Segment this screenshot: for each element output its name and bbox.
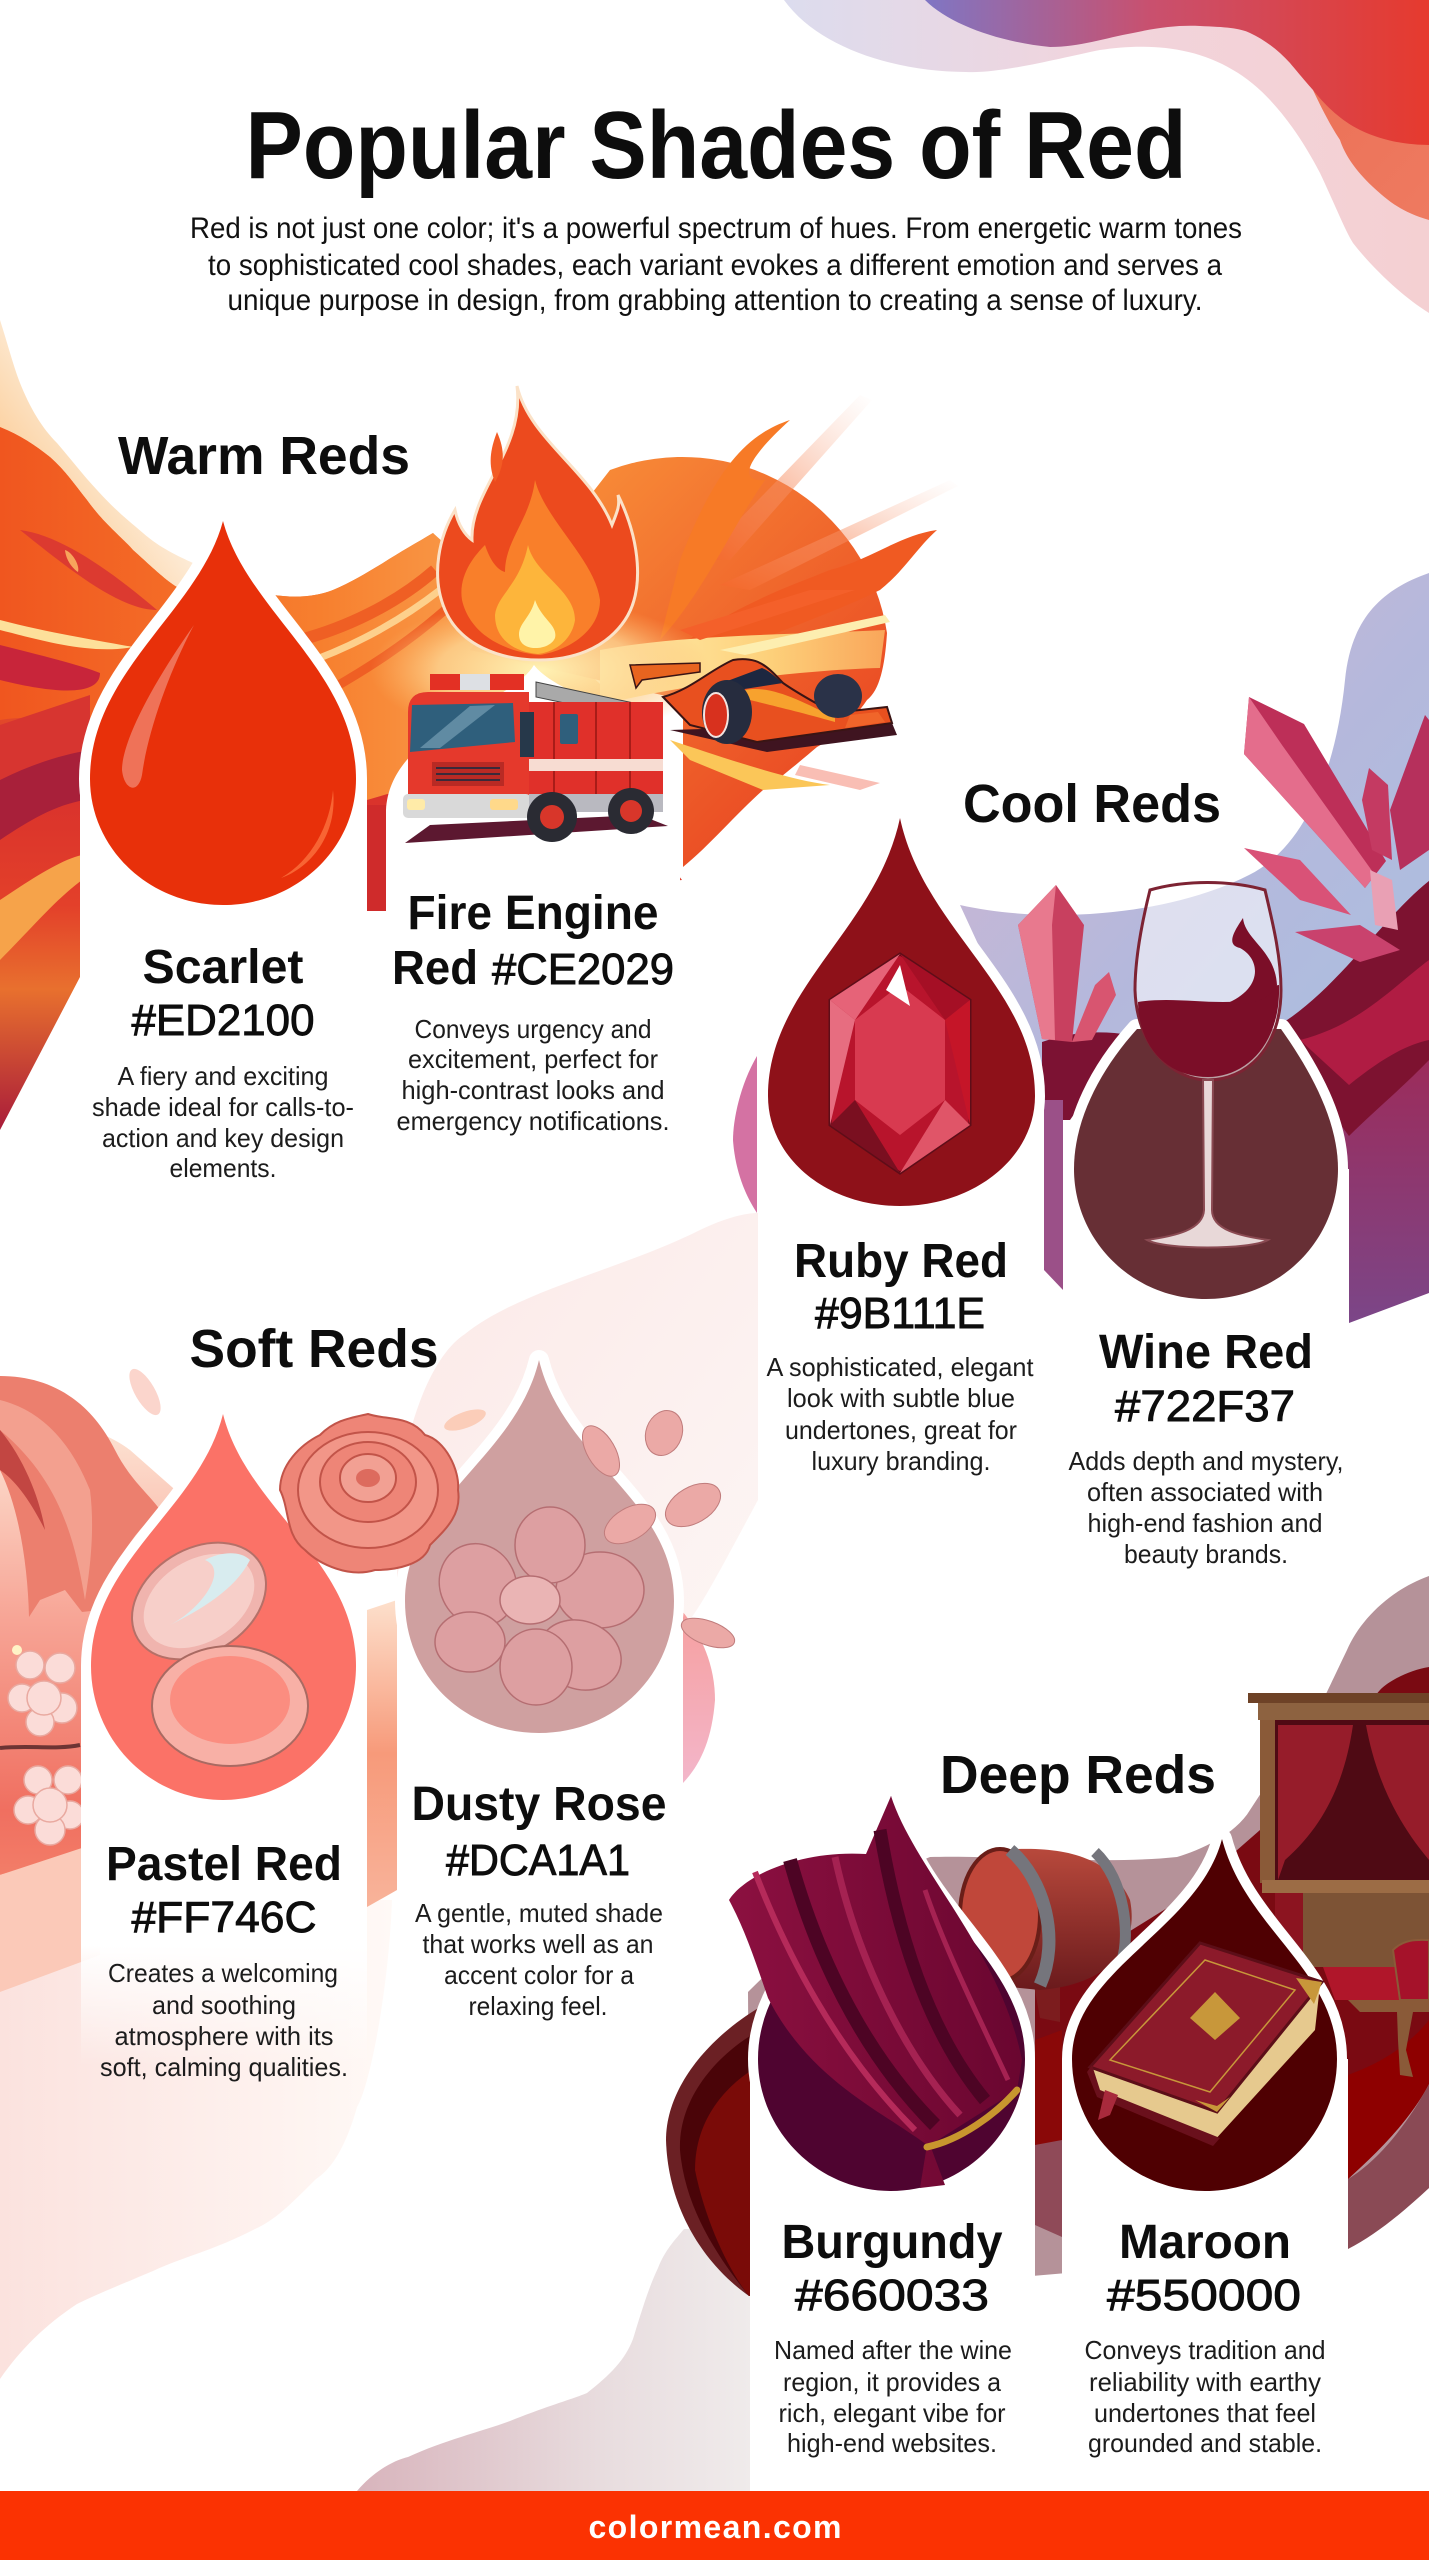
intro paragraph: to sophisticated cool shades, each variant evokes a different emotion and serves a [208, 249, 1222, 282]
wine white backing [1065, 1029, 1349, 1609]
icon: curtain [729, 1796, 1022, 2188]
icon: wine barrel [960, 1849, 1132, 2022]
icon: floating petals [123, 1364, 738, 1654]
maroon drop [1072, 1839, 1337, 2191]
wine drop [1074, 1029, 1338, 1299]
soft background shapes [0, 1425, 715, 1992]
card text: wine red: beauty brands. [1124, 1539, 1288, 1569]
red divider strip [367, 805, 386, 911]
background: top right waves [784, 0, 1429, 313]
icon: flame [438, 386, 638, 660]
orange sun circle [470, 457, 887, 867]
card text: fire engine red: Conveys urgency and [414, 1014, 652, 1044]
maroon white backing [1062, 1839, 1348, 2491]
icon: blush compact [110, 1519, 308, 1766]
scarlet white backing [80, 521, 367, 1219]
card text: scarlet: shade ideal for calls-to- [92, 1092, 354, 1122]
card text: dusty rose: that works well as an [422, 1929, 654, 1959]
card text: fire engine red: high-contrast looks and [402, 1075, 664, 1105]
icon: cherry blossoms [0, 1645, 84, 1845]
card text: pastel red: atmosphere with its [114, 2021, 334, 2051]
card text: dusty rose: A gentle, muted shade [415, 1898, 663, 1928]
card text: burgundy: Burgundy [782, 2216, 1003, 2269]
card text: pastel red: and soothing [152, 1990, 296, 2020]
intro paragraph: Red is not just one color; it's a powerful spectrum of hues. From energetic warm tones [190, 212, 1242, 245]
card text: burgundy: rich, elegant vibe for [778, 2398, 1006, 2428]
icon: scarf [0, 1376, 160, 1617]
card text: ruby red: luxury branding. [812, 1446, 990, 1476]
card text: wine red: high-end fashion and [1088, 1508, 1322, 1538]
icon: race car [630, 659, 897, 752]
card text: scarlet: elements. [170, 1153, 276, 1183]
heading: warm reds: Warm Reds [118, 426, 410, 486]
card text: fire engine red: emergency notifications. [396, 1106, 670, 1136]
icon: fire truck [403, 674, 668, 843]
card text: ruby red: A sophisticated, elegant [766, 1352, 1034, 1382]
card text: burgundy: Named after the wine [774, 2335, 1012, 2365]
pastel white backing [81, 1414, 367, 2066]
card text: dusty rose: accent color for a [444, 1960, 635, 1990]
panel: warm reds [0, 320, 958, 1219]
footer bar: colormean.com [588, 2509, 842, 2545]
card text: burgundy [774, 2216, 1012, 2458]
burgundy drop [758, 1796, 1025, 2191]
card text: ruby red: Ruby Red [794, 1235, 1008, 1288]
icon: canopy furniture [1248, 1693, 1429, 2077]
icon: wine glass [1135, 882, 1281, 1248]
card text: ruby red: undertones, great for [785, 1415, 1017, 1445]
card text: pastel red: Pastel Red [106, 1838, 342, 1891]
card text: maroon: Maroon [1119, 2216, 1291, 2269]
warm background swoosh [0, 320, 682, 1130]
card text: pastel red: soft, calming qualities. [100, 2052, 348, 2082]
heading: soft reds: Soft Reds [190, 1319, 438, 1379]
card text: fire engine red: #CE2029 [492, 945, 674, 994]
card text: ruby red: #9B111E [815, 1289, 985, 1338]
burgundy white backing [750, 1796, 1035, 2491]
card text: wine red: #722F37 [1115, 1382, 1295, 1431]
card text: burgundy: #660033 [795, 2271, 989, 2320]
ruby white backing [758, 818, 1044, 1516]
title: Popular Shades of Red [246, 92, 1186, 199]
dusty white backing [397, 1360, 683, 2041]
flame glow [370, 600, 710, 740]
card text: wine red [1068, 1326, 1344, 1569]
card text: maroon: grounded and stable. [1088, 2428, 1322, 2458]
card text: scarlet [92, 941, 354, 1183]
card text: scarlet: #ED2100 [132, 996, 314, 1045]
card text: scarlet: Scarlet [142, 941, 304, 994]
icon: crystals [1018, 697, 1429, 1042]
card text: fire engine red: Red [392, 942, 478, 995]
heading: cool reds: Cool Reds [963, 774, 1221, 834]
pastel red drop [91, 1414, 356, 1800]
scarlet drop [90, 521, 356, 905]
dusty rose drop [405, 1360, 674, 1733]
card text: scarlet: A fiery and exciting [118, 1061, 328, 1091]
card text: maroon: undertones that feel [1094, 2398, 1316, 2428]
panel: cool reds [733, 573, 1429, 1609]
icon: rose flower [280, 1414, 459, 1572]
card text: dusty rose: relaxing feel. [468, 1991, 608, 2021]
card text: maroon [1084, 2216, 1326, 2458]
icon: leather book [1087, 1943, 1322, 2146]
deep background shapes [666, 1576, 1429, 2300]
card text: ruby red: look with subtle blue [787, 1383, 1015, 1413]
card text: pastel red [100, 1838, 348, 2082]
card text: maroon: Conveys tradition and [1084, 2335, 1326, 2365]
footer bar [0, 2491, 1429, 2560]
fire rays [600, 395, 958, 790]
intro paragraph: unique purpose in design, from grabbing attention to creating a sense of luxury. [228, 284, 1202, 317]
card text: maroon: #550000 [1107, 2271, 1301, 2320]
background: pale pink wave middle [397, 1213, 758, 1700]
panel: deep reds [666, 1576, 1429, 2491]
card text: dusty rose [412, 1778, 666, 2021]
cool background shapes [733, 573, 1429, 1323]
card text: wine red: Wine Red [1099, 1326, 1313, 1379]
card text: scarlet: action and key design [102, 1123, 344, 1153]
card text: fire engine red: excitement, perfect for [408, 1044, 658, 1074]
card text: wine red: often associated with [1087, 1477, 1323, 1507]
intro paragraph [190, 212, 1242, 317]
background: pale pink wave lower left [0, 1900, 392, 2379]
card text: burgundy: region, it provides a [783, 2367, 1002, 2397]
card text: pastel red: #FF746C [132, 1893, 316, 1942]
card text: maroon: reliability with earthy [1089, 2367, 1321, 2397]
heading: deep reds: Deep Reds [940, 1745, 1216, 1805]
card text: fire engine red [392, 887, 674, 1136]
panel: soft reds [0, 1319, 738, 2082]
card text: wine red: Adds depth and mystery, [1068, 1446, 1344, 1476]
card text: pastel red: Creates a welcoming [108, 1958, 338, 1988]
background: mauve band at bottom [357, 2229, 760, 2491]
card text: fire engine red: Fire Engine [408, 887, 658, 940]
fire engine white backing [386, 665, 680, 1180]
card text: burgundy: high-end websites. [787, 2428, 997, 2458]
card text: dusty rose: Dusty Rose [412, 1778, 666, 1831]
card text: dusty rose: #DCA1A1 [446, 1836, 630, 1885]
icon: petal flower [426, 1507, 644, 1705]
icon: ruby gem [830, 954, 970, 1173]
card text: ruby red [766, 1235, 1034, 1476]
ruby drop [768, 818, 1035, 1206]
